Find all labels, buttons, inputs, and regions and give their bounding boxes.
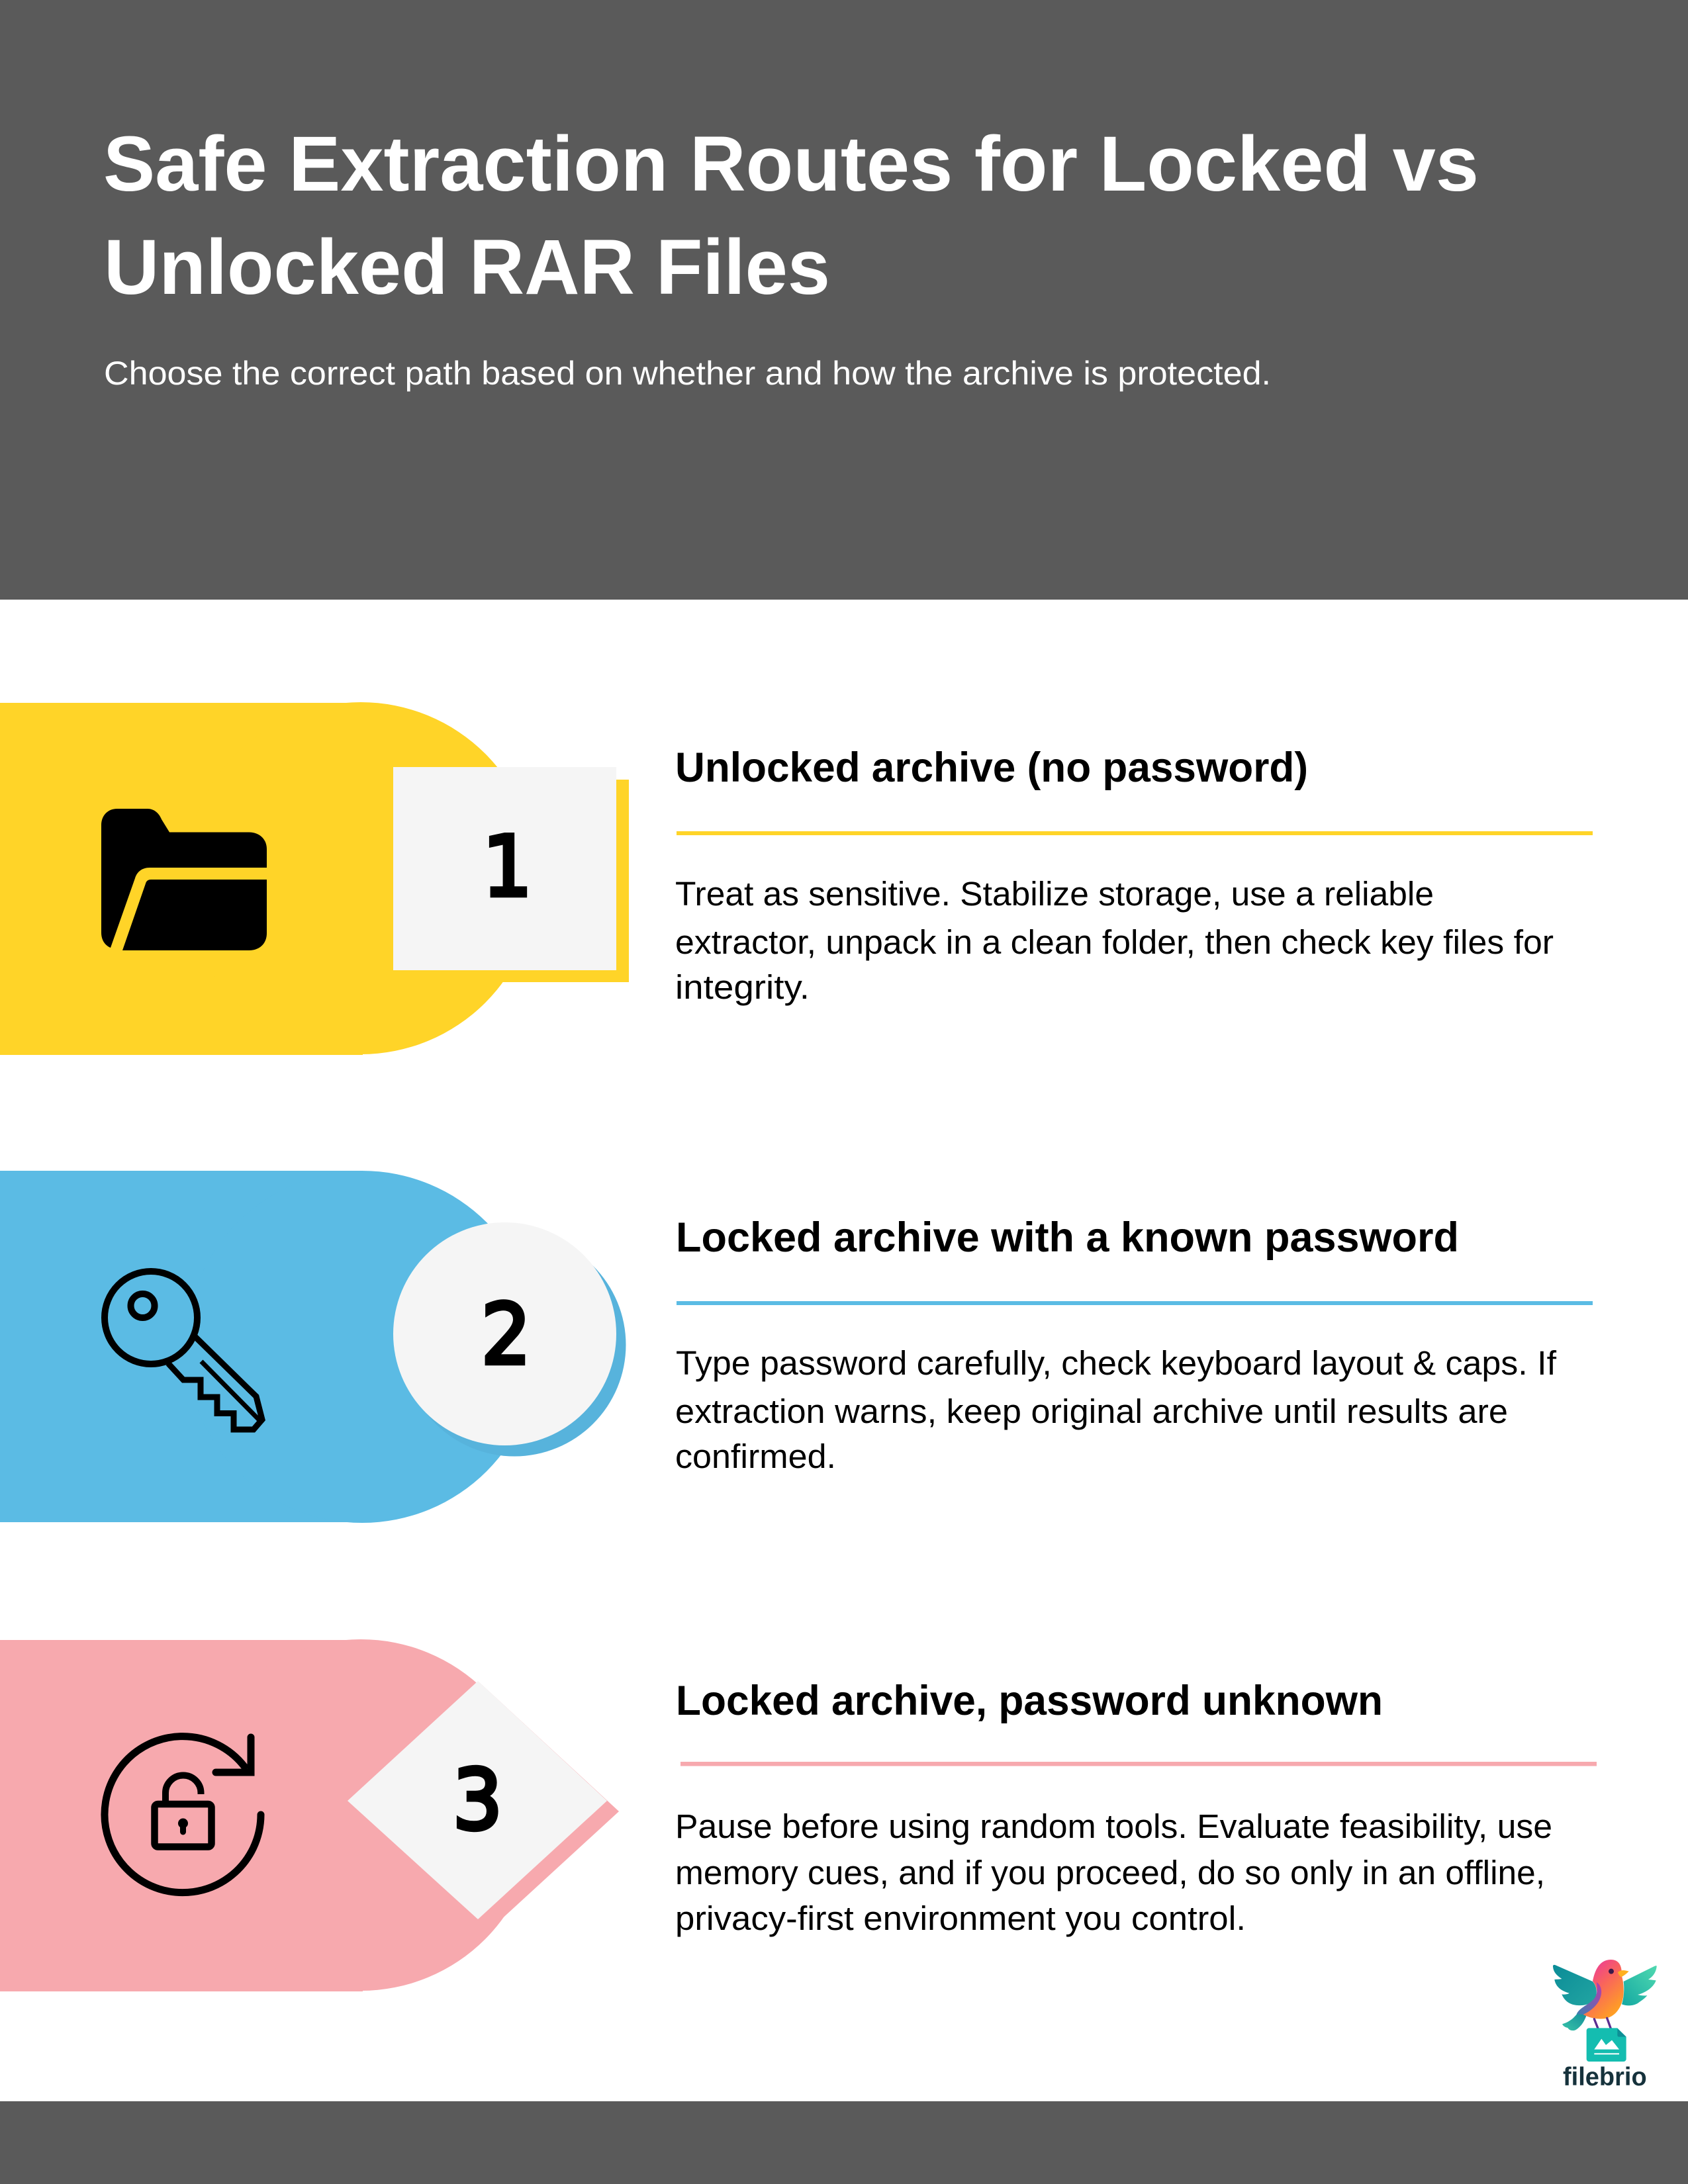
step 1 body text: Treat as sensitive. Stabilize storage, use a reliable	[675, 875, 1434, 913]
icon: unlock with arrow	[105, 1737, 261, 1893]
step 1 heading: Unlocked archive (no password)	[675, 745, 1308, 791]
logo: filebrio	[1553, 1960, 1657, 2091]
file	[1587, 2028, 1626, 2062]
pink tab shape	[0, 1639, 536, 1991]
title: Safe Extraction Routes for Locked vs	[103, 120, 1479, 208]
step 3 body text: Pause before using random tools. Evaluate feasibility, use	[675, 1807, 1552, 1845]
step 3 heading: Locked archive, password unknown	[676, 1678, 1383, 1724]
step 2 rule	[677, 1301, 1593, 1305]
step 1 body text	[675, 875, 1554, 1006]
yellow tab shape	[0, 702, 537, 1055]
step 3 body text: memory cues, and if you proceed, do so only in an offline,	[675, 1854, 1545, 1891]
header band	[0, 0, 1688, 600]
number badge shadow	[359, 1682, 619, 1930]
panel: step 1 unlocked archive	[0, 702, 1593, 1055]
step 3 rule	[680, 1762, 1597, 1766]
blue tab shape	[0, 1171, 538, 1523]
number badge shadow	[402, 1234, 626, 1456]
step 1 body text: integrity.	[675, 968, 810, 1006]
number badge: 2: 2	[481, 1286, 531, 1383]
step 3 body text	[675, 1807, 1552, 1937]
subtitle: Choose the correct path based on whether and how the archive is protected.	[104, 355, 1271, 392]
step 1 rule	[677, 831, 1593, 835]
step 2 heading: Locked archive with a known password	[676, 1214, 1459, 1261]
number badge: 1	[393, 767, 616, 970]
footer band	[0, 2101, 1688, 2184]
title: Unlocked RAR Files	[104, 224, 830, 311]
step 2 body text: Type password carefully, check keyboard layout & caps. If	[676, 1344, 1557, 1382]
number badge: 3	[348, 1681, 607, 1919]
icon: open folder	[101, 809, 267, 950]
panel: step 3 unknown password	[0, 1639, 1597, 1991]
number badge shadow	[406, 780, 629, 982]
wordmark: filebrio	[1563, 2062, 1647, 2091]
number badge: 3: 3	[453, 1751, 502, 1848]
title	[103, 120, 1479, 311]
step 3 body text: privacy-first environment you control.	[675, 1899, 1246, 1937]
number badge: 1: 1	[483, 818, 532, 915]
panel: step 2 known password	[0, 1171, 1593, 1523]
icon: key	[105, 1271, 262, 1430]
bird	[1553, 1960, 1657, 2032]
step 1 body text: extractor, unpack in a clean folder, then check key files for	[675, 923, 1554, 961]
step 2 body text: extraction warns, keep original archive until results are	[675, 1392, 1508, 1430]
step 2 body text: confirmed.	[675, 1437, 836, 1475]
number badge: 2	[393, 1222, 616, 1445]
step 2 body text	[675, 1344, 1557, 1475]
